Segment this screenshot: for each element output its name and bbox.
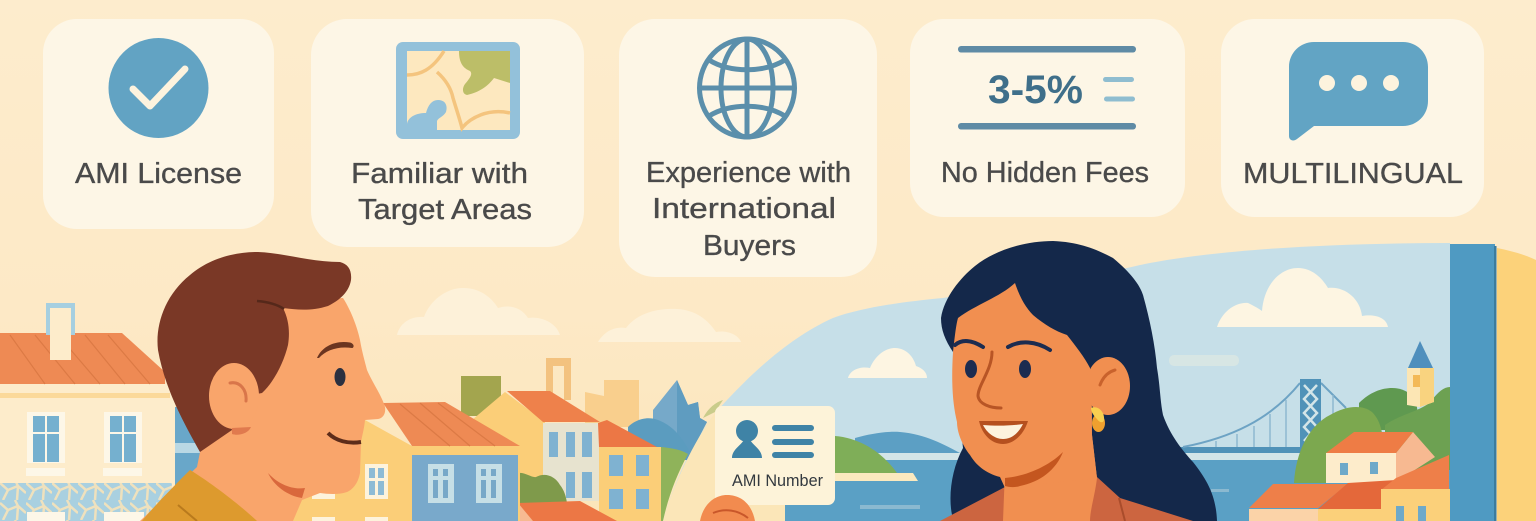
label: AMI Number: AMI Number [732, 471, 823, 490]
eye [334, 368, 346, 386]
distant tower frame [546, 358, 571, 400]
sand bar [835, 473, 918, 481]
distant mountain [653, 380, 707, 460]
green slope [661, 447, 688, 521]
icon: speech bubble [1289, 42, 1428, 140]
ear detail [230, 383, 246, 401]
church tower [1407, 341, 1434, 407]
eyes [965, 360, 1031, 378]
label: Familiar with: Familiar with [351, 158, 528, 190]
face [952, 283, 1097, 488]
ear [209, 363, 259, 429]
hair strand [257, 301, 284, 309]
eyebrows [955, 341, 1050, 350]
icon: fee rate 3-5% [958, 46, 1136, 130]
figure: man in profile [140, 252, 385, 521]
hills [1359, 388, 1420, 430]
card: Experience with International Buyers [619, 19, 877, 277]
clouds in the warm sky [397, 288, 741, 342]
panel: old town left [0, 303, 707, 521]
patterned lower wall [0, 483, 172, 521]
icon: person [732, 420, 762, 458]
hair [157, 252, 351, 452]
card: AMI License [43, 19, 274, 229]
far hill [855, 432, 960, 453]
card: Multilingual [1221, 19, 1484, 217]
ear shadow [232, 427, 251, 435]
label: MULTILINGUAL: MULTILINGUAL [1243, 158, 1463, 190]
hair [941, 241, 1217, 521]
leaf tip [703, 400, 723, 418]
lower roof [518, 501, 617, 521]
blue building behind man [174, 407, 204, 521]
collar crease [178, 505, 197, 521]
yellow gabled house [472, 391, 600, 521]
chin shadow [268, 473, 305, 498]
icon: check circle [108, 38, 208, 138]
cloud small [848, 348, 927, 378]
panel: coastal view with bridge [663, 243, 1450, 521]
card: No Hidden Fees [910, 19, 1185, 217]
ear detail [1100, 370, 1115, 385]
label: Experience with: Experience with [646, 157, 851, 189]
windows [26, 412, 142, 476]
mouth [979, 421, 1028, 444]
distant building [585, 380, 639, 427]
label: AMI License: AMI License [75, 158, 242, 190]
neck and face [140, 298, 385, 521]
neck [1003, 435, 1097, 521]
smile [328, 433, 361, 443]
window frame: yellow wall [1497, 248, 1536, 521]
label: No Hidden Fees: No Hidden Fees [941, 157, 1149, 189]
window frame: blue post [1450, 244, 1496, 521]
eyebrow [317, 342, 354, 358]
water [785, 460, 1450, 521]
label: Buyers: Buyers [703, 230, 796, 262]
shirt [142, 470, 257, 521]
corner house [598, 420, 661, 521]
icon: map [396, 42, 520, 139]
earring [1091, 407, 1105, 432]
hand holding card [700, 495, 755, 521]
chimney [46, 303, 75, 360]
bush [518, 473, 567, 503]
id card: AMI Number [715, 406, 835, 505]
blouse [940, 477, 1193, 521]
village houses [1249, 455, 1450, 521]
house with terracotta roof [0, 303, 175, 521]
chin shadow [1005, 452, 1063, 487]
cream sleeve behind card [663, 413, 785, 521]
icon: fee rate 3-5%: 3-5% [988, 68, 1083, 112]
icon: globe [700, 39, 794, 137]
card: Familiar with Target Areas [311, 19, 584, 247]
white house [1326, 432, 1435, 483]
ear [1086, 357, 1130, 415]
near hill [835, 436, 897, 473]
olive square [461, 376, 501, 416]
id lines [772, 425, 814, 458]
label: International: International [652, 193, 836, 225]
cloud large [1217, 268, 1388, 327]
yellow house with blue facade [293, 402, 520, 521]
faint cloud bar [1169, 355, 1239, 366]
blouse lapel [1119, 498, 1125, 521]
suspension bridge [1179, 379, 1346, 453]
blue hill [628, 418, 690, 460]
figure: woman [940, 241, 1217, 521]
nose [978, 352, 1001, 408]
sky arc [663, 243, 1450, 521]
label: Target Areas: Target Areas [358, 194, 532, 226]
